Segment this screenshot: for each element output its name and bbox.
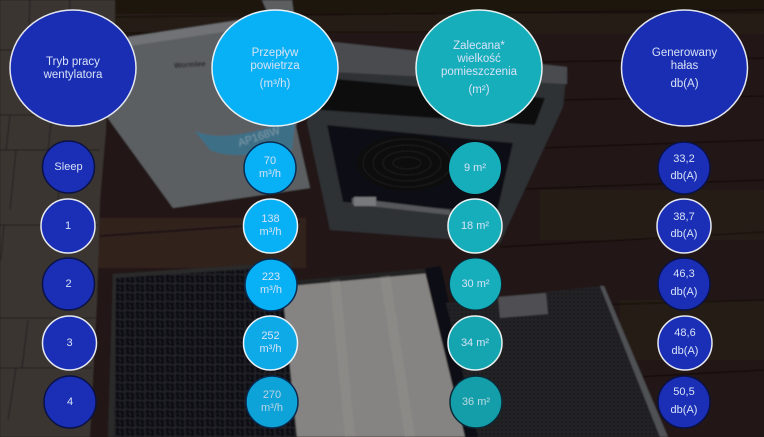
column: airflow values: 138 [261, 213, 280, 225]
column: noise values: db(A) [672, 345, 698, 357]
header: recommended room size: (m²) [468, 84, 490, 96]
header: airflow: Przepływ [252, 47, 299, 59]
white purifier box: AP168W [237, 125, 282, 150]
column: fan mode values: 3 [66, 337, 73, 349]
column: noise values [657, 142, 712, 428]
column: fan mode values: 1 [65, 220, 71, 232]
column: noise values: 38,7 [673, 211, 695, 223]
column: airflow values: 270 [263, 389, 281, 401]
column: airflow values: 252 [261, 330, 280, 342]
header: generated noise: Generowany [652, 47, 717, 59]
header: recommended room size: wielkość [456, 53, 501, 65]
column: airflow values: m³/h [259, 168, 281, 180]
column: room size values: 9 m² [464, 162, 486, 174]
header: recommended room size [416, 10, 542, 126]
white purifier box [107, 20, 310, 208]
column: airflow values [244, 142, 298, 428]
column: noise values: db(A) [671, 170, 697, 182]
header: fan mode: Tryb pracy [46, 56, 100, 68]
column: room size values: 36 m² [462, 396, 490, 408]
column: noise values: 33,2 [673, 153, 695, 165]
column: room size values [448, 142, 502, 428]
column: room size values: 30 m² [461, 278, 490, 290]
column: noise values: 48,6 [674, 327, 696, 339]
filter: black honeycomb [110, 262, 305, 437]
header: generated noise: hałas [671, 60, 698, 72]
header: airflow [212, 10, 338, 126]
header: fan mode: wentylatora [43, 69, 103, 81]
white purifier box: Wormlee [174, 59, 206, 70]
header: recommended room size: pomieszczenia [441, 66, 518, 78]
header: generated noise: db(A) [670, 78, 699, 90]
column: airflow values: m³/h [260, 343, 282, 355]
filter: white HEPA [282, 272, 465, 437]
column: fan mode values: 4 [67, 396, 73, 408]
column: fan mode values: 2 [65, 278, 72, 290]
column: fan mode values [41, 141, 96, 428]
column: room size values: 18 m² [461, 220, 489, 232]
header: airflow: powietrza [250, 60, 300, 72]
header: airflow: (m³/h) [260, 78, 290, 90]
column: noise values: 50,5 [673, 386, 695, 398]
column: noise values: db(A) [671, 228, 697, 240]
column: noise values: db(A) [671, 286, 697, 298]
column: airflow values: 223 [262, 271, 280, 283]
filter: mesh [446, 286, 662, 437]
purifier unit with fan [307, 42, 567, 243]
column: airflow values: m³/h [260, 226, 282, 238]
header: fan mode [10, 10, 136, 126]
column: airflow values: m³/h [261, 402, 283, 414]
column: room size values: 34 m² [461, 337, 489, 349]
header: generated noise [622, 10, 748, 126]
column: fan mode values: Sleep [54, 161, 83, 173]
column: airflow values: m³/h [260, 284, 282, 296]
column: airflow values: 70 [264, 155, 276, 167]
header: recommended room size: Zalecana* [453, 40, 505, 52]
column: noise values: 46,3 [673, 268, 695, 280]
column: noise values: db(A) [671, 404, 697, 416]
